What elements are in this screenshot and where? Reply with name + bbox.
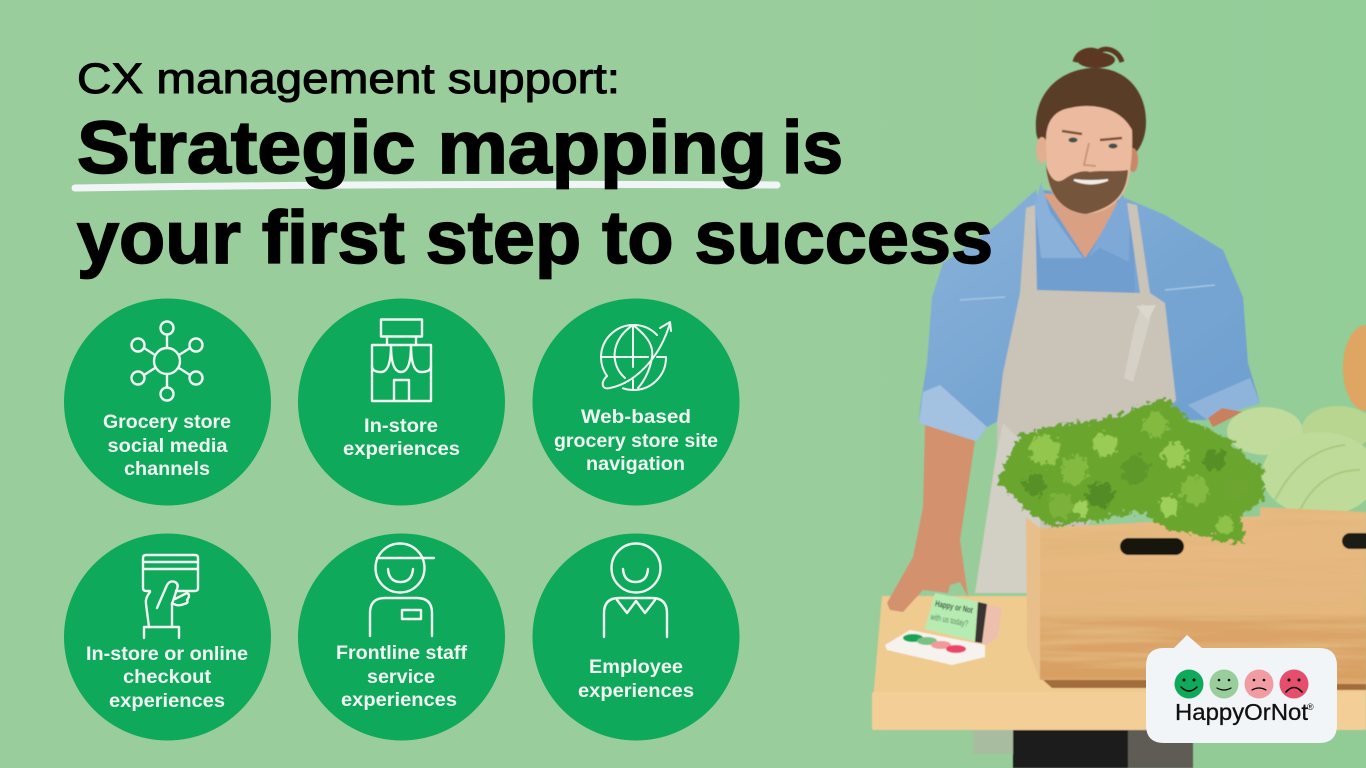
label (103, 411, 231, 480)
label: Frontline staff (336, 642, 468, 664)
label (343, 415, 460, 460)
headline: is (782, 106, 843, 189)
icon: very unhappy face (1280, 670, 1308, 698)
panel: employee experiences (532, 534, 740, 740)
icon: store front (372, 320, 431, 401)
label: Web-based (581, 406, 691, 428)
icon: hand holding card (143, 555, 198, 638)
label: experiences (343, 438, 460, 460)
label: grocery store site (554, 430, 718, 452)
headline underline (75, 184, 777, 188)
label (578, 656, 694, 702)
label: Employee (589, 656, 683, 678)
headline: Strategic mapping (77, 106, 767, 189)
panel: web-based grocery store site navigation (532, 298, 740, 506)
crate: right (1260, 507, 1366, 690)
device card text: Happy or Not (934, 598, 974, 615)
device card text (929, 598, 974, 629)
panel: in-store or online checkout experiences (64, 534, 271, 740)
subtitle: CX management support: (77, 55, 620, 103)
logo: HappyOrNot speech bubble (1146, 635, 1337, 743)
registered mark: ® (1307, 702, 1314, 712)
panel: in-store experiences (298, 298, 505, 506)
feedback device (885, 593, 1002, 665)
wordmark: HappyOrNot (1175, 699, 1309, 725)
icon: very happy face (1174, 670, 1204, 698)
headline: your first step to success (77, 196, 993, 279)
lettuce (997, 398, 1265, 545)
label: In-store (364, 415, 438, 437)
headline (77, 106, 993, 279)
label: social media (108, 435, 228, 457)
cabbages (1227, 406, 1366, 516)
label (336, 642, 468, 711)
icon: social network hub (132, 322, 202, 400)
icon: unhappy face (1244, 670, 1274, 698)
device card text: with us today? (929, 611, 969, 629)
photo: grocer with produce crates (872, 49, 1366, 768)
table (872, 596, 1366, 768)
icon: globe with arrow (601, 322, 671, 390)
panel: grocery store social media channels (64, 298, 271, 506)
icon: happy face (1210, 670, 1238, 698)
icon: staff member with cap (370, 544, 434, 636)
label: checkout (123, 666, 212, 688)
bread loaf (1343, 325, 1366, 411)
label: channels (124, 458, 210, 480)
label: navigation (586, 453, 685, 475)
label: In-store or online (86, 643, 248, 665)
panel: frontline staff service experiences (298, 534, 505, 740)
forearm and hand (887, 425, 975, 612)
crate: main with lettuce (997, 398, 1265, 688)
icon: smiling employee (604, 544, 667, 637)
label (86, 643, 248, 712)
label: experiences (578, 680, 694, 702)
label: Grocery store (103, 411, 231, 433)
label: experiences (109, 690, 225, 712)
label (554, 406, 718, 475)
grocer (919, 49, 1260, 593)
head (1036, 49, 1146, 214)
label: experiences (341, 689, 457, 711)
label: service (367, 666, 435, 688)
